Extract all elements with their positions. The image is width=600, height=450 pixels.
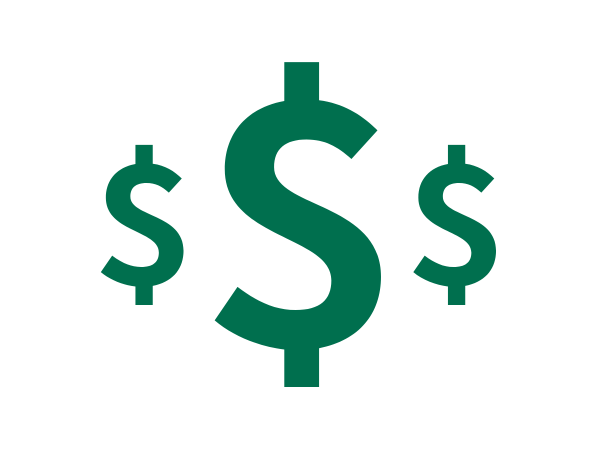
icon: right small dollar sign: $ [405, 93, 508, 332]
icon: left small dollar sign: $ [92, 93, 196, 332]
